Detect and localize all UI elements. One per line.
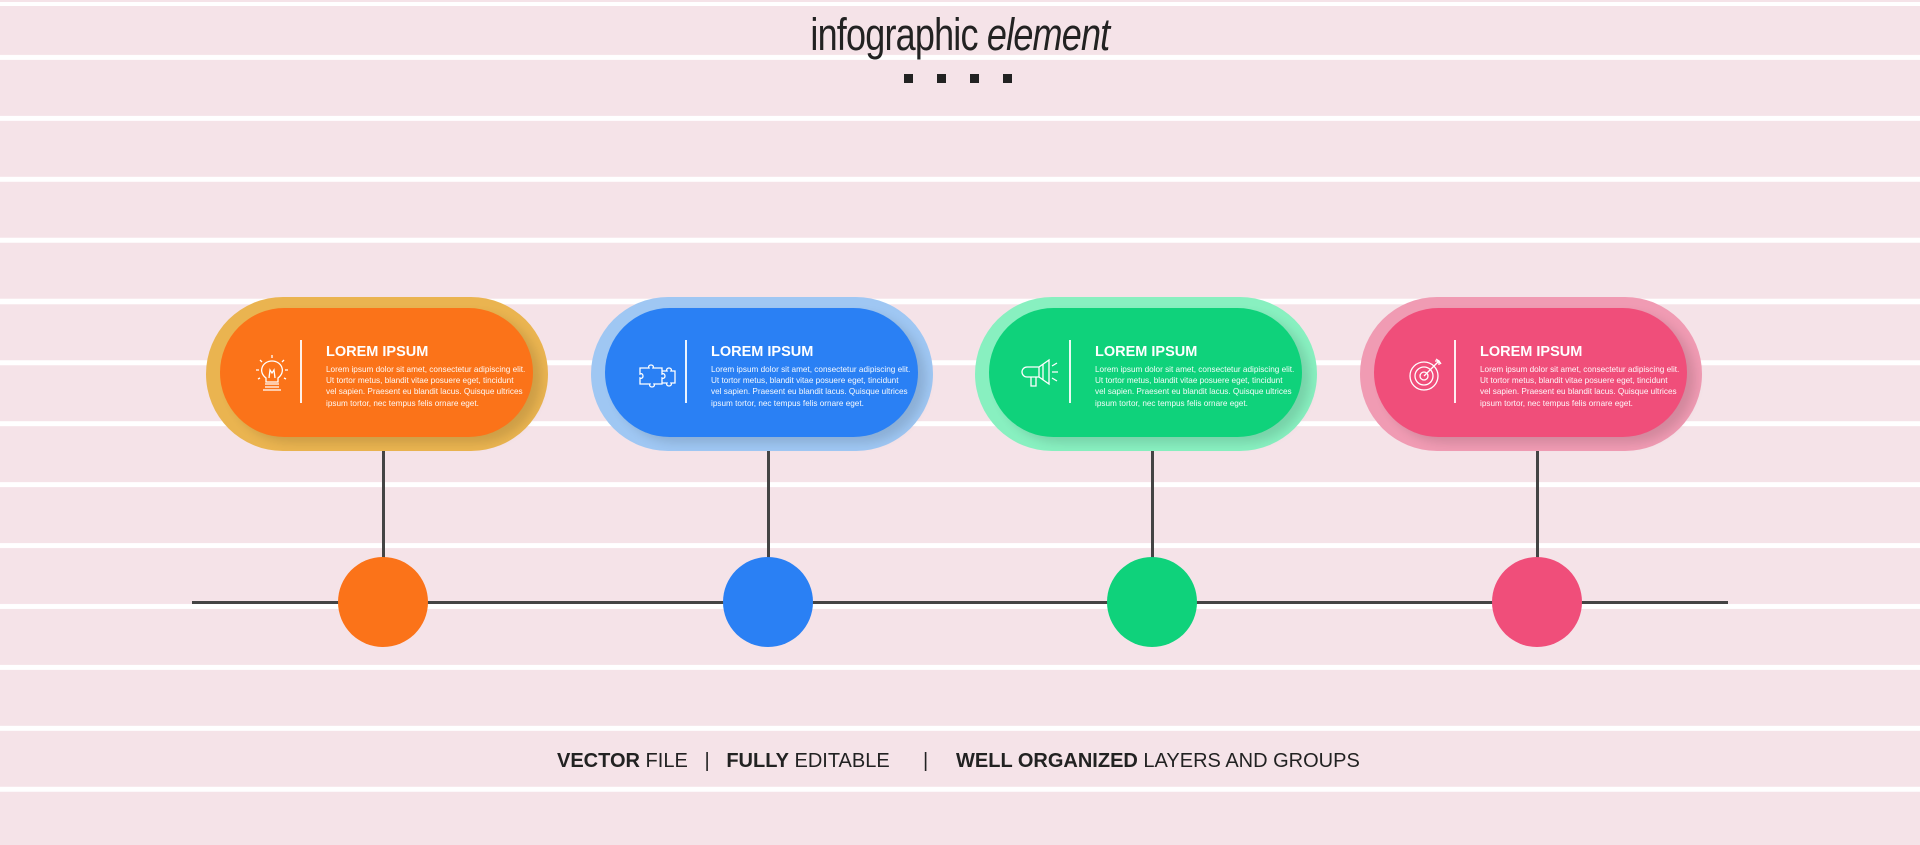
text: step 1: Lorem ipsum dolor sit amet, consectetur adipiscing elit. Ut tortor metus, blandit vitae posuere eget, tincidunt vel sapien. Praesent eu blandit lacus. Quisque ultrices ipsum tortor, nec tempus felis ornare eget. bbox=[326, 365, 525, 408]
connector 1 bbox=[382, 451, 385, 561]
text: step 2: LOREM IPSUM bbox=[711, 344, 813, 360]
title dots bbox=[904, 74, 1012, 83]
timeline dot 1 bbox=[338, 557, 428, 647]
panel: step 3 bbox=[975, 297, 1317, 451]
panel: step 1 bbox=[206, 297, 548, 451]
text: step 2: Lorem ipsum dolor sit amet, consectetur adipiscing elit. Ut tortor metus, blandit vitae posuere eget, tincidunt vel sapien. Praesent eu blandit lacus. Quisque ultrices ipsum tortor, nec tempus felis ornare eget. bbox=[711, 365, 910, 408]
icon: puzzle bbox=[639, 364, 676, 388]
panel: step 2 bbox=[591, 297, 933, 451]
icon: megaphone bbox=[1021, 358, 1058, 387]
text: step 2 bbox=[711, 344, 910, 408]
text: step 4 bbox=[1480, 344, 1679, 408]
text: step 4: Lorem ipsum dolor sit amet, consectetur adipiscing elit. Ut tortor metus, blandit vitae posuere eget, tincidunt vel sapien. Praesent eu blandit lacus. Quisque ultrices ipsum tortor, nec tempus felis ornare eget. bbox=[1480, 365, 1679, 408]
icon: target bbox=[1409, 358, 1442, 391]
panel: step 4 bbox=[1360, 297, 1702, 451]
timeline dot 2 bbox=[723, 557, 813, 647]
text: step 1: LOREM IPSUM bbox=[326, 344, 428, 360]
connector 4 bbox=[1536, 451, 1539, 561]
connector 3 bbox=[1151, 451, 1154, 561]
text: step 3 bbox=[1095, 344, 1294, 408]
title: infographic element bbox=[810, 9, 1110, 60]
text: step 3: LOREM IPSUM bbox=[1095, 344, 1197, 360]
timeline axis bbox=[192, 601, 1728, 604]
footer text: VECTOR FILE | FULLY EDITABLE | WELL ORGANIZED LAYERS AND GROUPS bbox=[557, 750, 1360, 772]
text: step 3: Lorem ipsum dolor sit amet, consectetur adipiscing elit. Ut tortor metus, blandit vitae posuere eget, tincidunt vel sapien. Praesent eu blandit lacus. Quisque ultrices ipsum tortor, nec tempus felis ornare eget. bbox=[1095, 365, 1294, 408]
connector 2 bbox=[767, 451, 770, 561]
timeline dot 3 bbox=[1107, 557, 1197, 647]
text: step 1 bbox=[326, 344, 525, 408]
icon: light bulb bbox=[256, 355, 288, 391]
text: step 4: LOREM IPSUM bbox=[1480, 344, 1582, 360]
timeline dot 4 bbox=[1492, 557, 1582, 647]
